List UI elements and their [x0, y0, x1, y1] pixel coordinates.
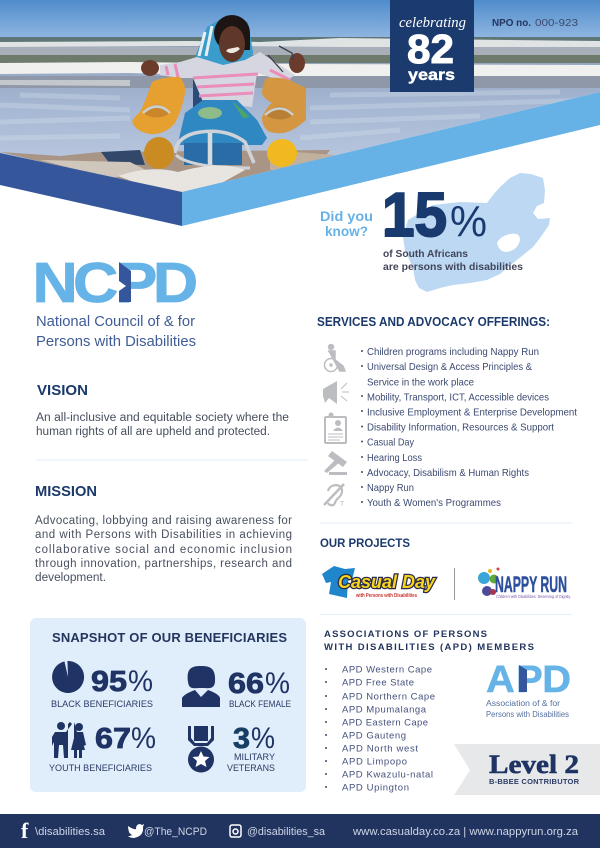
stat: 3 percent [233, 722, 275, 755]
celebrating 82 years badge: celebrating [399, 15, 466, 31]
facebook handle: \disabilities.sa [35, 826, 106, 838]
NPO number: 000-923 [535, 17, 578, 29]
APD members heading: ASSOCIATIONS OF PERSONS [324, 629, 487, 640]
icon: hearing loss: T [340, 501, 345, 508]
did you know: Did you [320, 208, 373, 224]
APD member list: APD Free State [342, 678, 414, 688]
label: military veterans: VETERANS [227, 763, 275, 773]
services list [361, 346, 577, 509]
15 percent statistic: 15 [382, 181, 447, 250]
stat: 95 percent: % [128, 665, 153, 698]
APD member list: APD Upington [342, 782, 409, 794]
logo: Casual Day: Casual Day [338, 572, 436, 592]
label: military veterans [227, 752, 275, 773]
stat: 3 percent: 3 [233, 723, 250, 755]
services list: Youth & Women's Programmes [367, 497, 501, 509]
icon: pie chart [52, 660, 85, 694]
APD members heading [324, 629, 534, 653]
services list: Hearing Loss [367, 452, 422, 464]
stat: 95 percent [91, 665, 153, 698]
15 percent statistic: of South Africans [383, 248, 468, 260]
logo: Nappy Run [478, 568, 571, 599]
services list: Service in the work place [367, 376, 474, 388]
APD member list: APD North west [342, 744, 418, 754]
sea and waves [0, 37, 600, 197]
Level 2 BBBEE ribbon [454, 744, 600, 795]
NPO number: NPO no. [492, 17, 531, 29]
our projects heading: OUR PROJECTS [320, 536, 410, 550]
mission: and with Persons with Disabilities in achieving [35, 529, 292, 541]
panel: snapshot of beneficiaries [30, 618, 306, 792]
angled light blue band [182, 92, 600, 226]
website links: www.casualday.co.za | www.nappyrun.org.za [352, 826, 579, 838]
did you know: know? [325, 223, 368, 239]
foam around the chair [118, 166, 245, 192]
logo: Nappy Run: Children with Disabilities: Deserving of Dignity. [496, 594, 571, 599]
services list: Mobility, Transport, ICT, Accessible devices [367, 392, 549, 404]
mission: MISSION [35, 483, 97, 500]
APD member list: APD Kwazulu-natal [342, 770, 433, 780]
15 percent statistic: are persons with disabilities [383, 261, 523, 273]
services list: Children programs including Nappy Run [367, 346, 539, 358]
stat: 66 percent [228, 667, 290, 700]
services list: Nappy Run [367, 482, 414, 494]
label: black female: BLACK FEMALE [229, 699, 291, 709]
snapshot heading: SNAPSHOT OF OUR BENEFICIARIES [52, 630, 287, 645]
APD member list: APD Mpumalanga [342, 704, 427, 716]
celebrating 82 years badge: 82 [407, 26, 454, 72]
mission: through innovation, partnerships, research and [35, 558, 292, 570]
services list: Inclusive Employment & Enterprise Development [367, 406, 577, 418]
label: black beneficiaries: BLACK BENEFICIARIES [51, 699, 153, 709]
NCPD logo [33, 251, 198, 350]
sky [0, 0, 600, 40]
APD members heading: WITH DISABILITIES (APD) MEMBERS [324, 642, 534, 653]
APD logo: Persons with Disabilities [486, 710, 569, 719]
icon: instagram [230, 825, 241, 837]
vision: VISION [37, 382, 88, 399]
NCPD logo: Persons with Disabilities [36, 334, 196, 350]
APD logo [486, 659, 571, 719]
APD logo: Association of & for [486, 699, 560, 708]
APD member list: APD Eastern Cape [342, 718, 428, 728]
APD member list: APD Gauteng [342, 730, 406, 742]
mission [35, 483, 292, 584]
vision [36, 382, 289, 438]
footer bar [0, 814, 600, 848]
vision: human rights of all are upheld and protected. [36, 426, 270, 438]
did you know [320, 208, 373, 239]
angled navy band [0, 153, 182, 226]
APD member list: APD Northern Cape [342, 692, 435, 702]
celebrating 82 years badge: years [408, 67, 455, 84]
NPO number [492, 17, 578, 29]
label: youth beneficiaries: YOUTH BENEFICIARIES [49, 763, 152, 773]
APD member list [325, 664, 435, 794]
wheelchair user [132, 15, 306, 170]
stat: 3 percent: % [251, 722, 275, 755]
APD member list: APD Western Cape [342, 664, 432, 676]
icon: hearing loss [324, 484, 345, 508]
icon: clipboard [325, 412, 346, 443]
stat: 67 percent [95, 722, 156, 755]
services list: Advocacy, Disabilism & Human Rights [367, 467, 529, 479]
services list: Universal Design & Access Principles & [367, 361, 532, 373]
instagram handle: @disabilities_sa [247, 826, 326, 838]
stat: 66 percent: % [265, 667, 290, 700]
Level 2 BBBEE ribbon: B-BBEE CONTRIBUTOR [489, 777, 580, 786]
15 percent statistic: % [450, 197, 487, 246]
mission: collaborative social and economic inclusion [35, 544, 292, 556]
hero photo: wheelchair user on the beach [0, 0, 600, 197]
APD logo: APD [486, 659, 571, 701]
icon: youth high five [52, 722, 86, 758]
mission: Advocating, lobbying and raising awareness for [35, 515, 292, 527]
icon: wheelchair [324, 344, 345, 372]
15 percent statistic [382, 181, 523, 273]
stat: 67 percent: 67 [95, 723, 131, 755]
services list: Casual Day [367, 436, 415, 448]
logo: Casual Day [322, 566, 436, 599]
stat: 67 percent: % [131, 722, 156, 755]
icon: facebook: f [21, 818, 29, 843]
celebrating 82 years badge [390, 0, 474, 92]
NCPD logo: NCPD [33, 251, 198, 314]
icon: gavel [324, 451, 347, 475]
icon: medal [188, 726, 214, 772]
icon: woman [182, 666, 220, 707]
stat: 66 percent: 66 [228, 668, 264, 700]
NCPD logo: National Council of & for [36, 314, 195, 330]
logo: Casual Day: with Persons with Disabilities [355, 593, 417, 599]
stat: 95 percent: 95 [91, 666, 127, 698]
map of South Africa [403, 173, 550, 292]
Level 2 BBBEE ribbon: Level 2 [489, 750, 579, 779]
services heading: SERVICES AND ADVOCACY OFFERINGS: [317, 315, 550, 329]
label: military veterans: MILITARY [234, 752, 275, 762]
APD member list: APD Limpopo [342, 756, 407, 768]
icon: megaphone [323, 381, 349, 404]
twitter handle: @The_NCPD [144, 826, 207, 838]
mission: development. [35, 572, 106, 584]
vision: An all-inclusive and equitable society where the [36, 412, 289, 424]
services list: Disability Information, Resources & Support [367, 422, 554, 434]
icon: twitter [128, 824, 144, 838]
